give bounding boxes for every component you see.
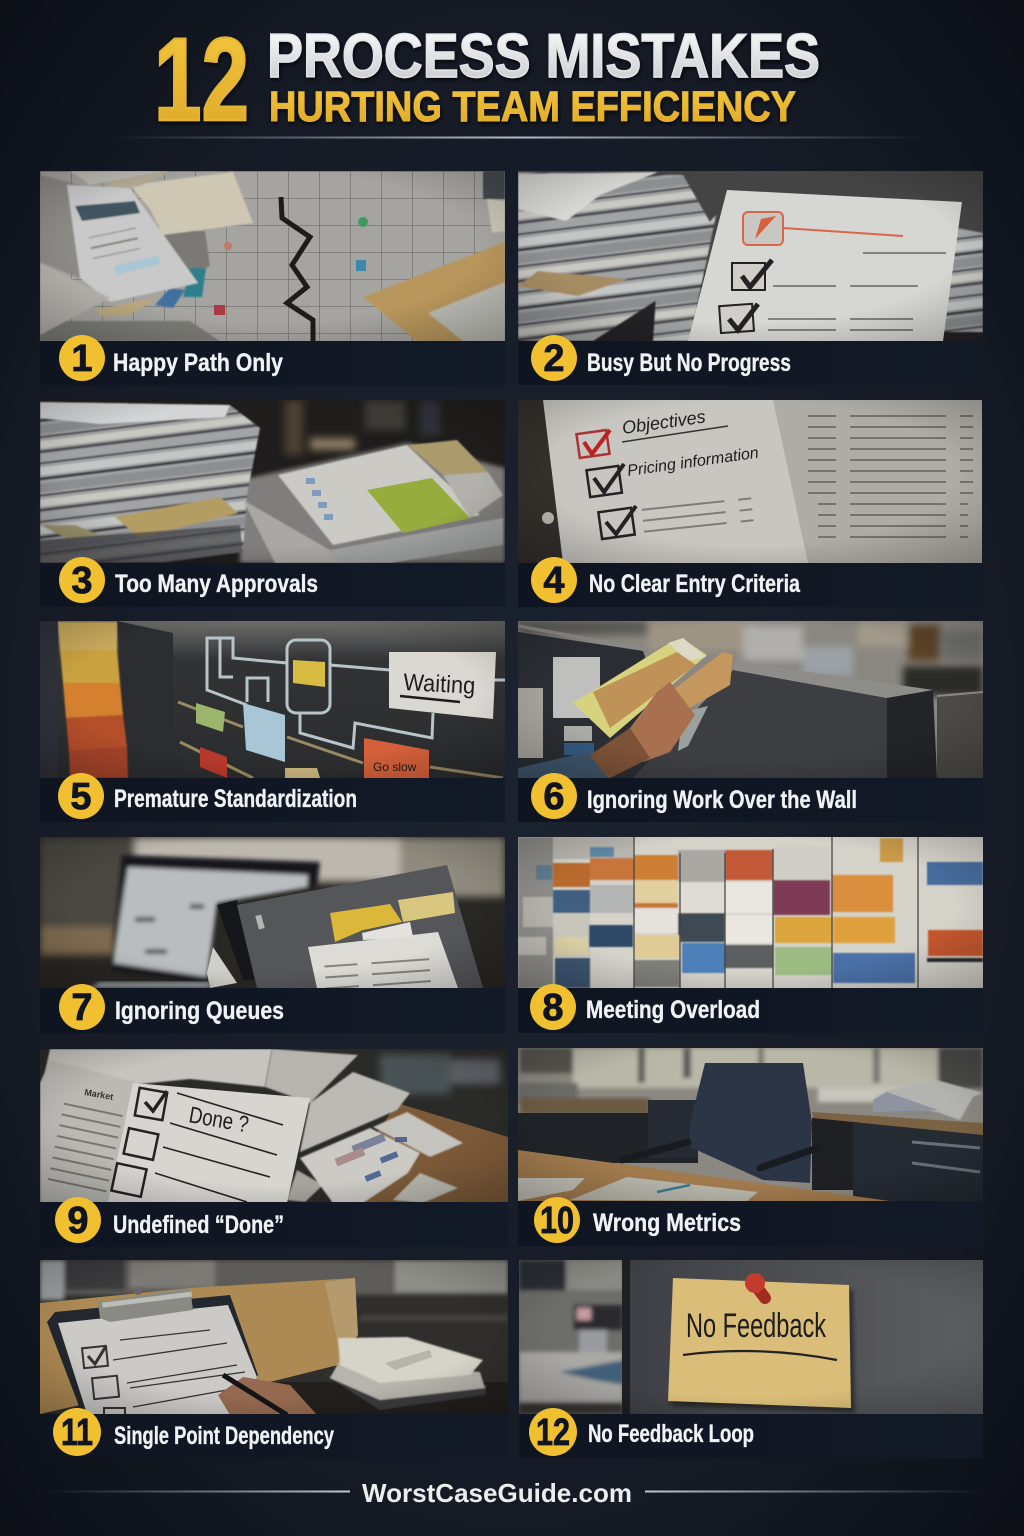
caption band bbox=[40, 778, 505, 822]
pin bbox=[745, 1273, 765, 1298]
photo: empty office chair bbox=[518, 1048, 983, 1201]
footer site name: WorstCaseGuide.com bbox=[362, 1478, 632, 1508]
photo: approval paper piles bbox=[40, 400, 505, 563]
number badge 2: 2 bbox=[543, 338, 565, 380]
caption band bbox=[518, 988, 983, 1033]
number badge 8 bbox=[530, 984, 576, 1030]
caption band bbox=[518, 341, 983, 385]
caption: Undefined “Done” bbox=[113, 1211, 284, 1239]
number badge 9 bbox=[55, 1197, 101, 1243]
caption: Wrong Metrics bbox=[593, 1209, 741, 1237]
number badge 10: 10 bbox=[540, 1200, 574, 1242]
panel 6: Ignoring Work Over the Wall bbox=[518, 621, 983, 822]
panel 12: No Feedback Loop bbox=[519, 1260, 983, 1458]
title number 12: 12 bbox=[154, 14, 249, 146]
caption: Premature Standardization bbox=[114, 785, 357, 813]
number badge 7 bbox=[59, 984, 105, 1030]
caption band bbox=[518, 563, 982, 607]
number badge 1: 1 bbox=[71, 338, 93, 380]
photo: laptop and stuffed folder bbox=[40, 837, 505, 988]
panel 4: No Clear Entry Criteria bbox=[518, 400, 982, 607]
photo: process board with waiting note: Go slow bbox=[373, 760, 417, 774]
title bbox=[154, 14, 820, 146]
number badge 9: 9 bbox=[67, 1200, 89, 1242]
number badge 12: 12 bbox=[536, 1412, 570, 1454]
caption: Happy Path Only bbox=[113, 349, 283, 377]
caption band bbox=[519, 1414, 983, 1458]
title line 1: PROCESS MISTAKES bbox=[267, 22, 820, 91]
number badge 4 bbox=[531, 557, 577, 603]
handwriting: Done ? bbox=[187, 1101, 251, 1137]
panel 1: Happy Path Only bbox=[40, 171, 505, 385]
photo: checklist papers bbox=[518, 400, 982, 563]
photo: checklist papers: Pricing information bbox=[626, 445, 760, 480]
number badge 8: 8 bbox=[542, 987, 564, 1029]
photo: grid map with broken path bbox=[40, 171, 505, 341]
photo: clipboard with signing hand bbox=[40, 1260, 508, 1414]
title line 2: HURTING TEAM EFFICIENCY bbox=[269, 83, 796, 131]
number badge 1 bbox=[59, 335, 105, 381]
number badge 11: 11 bbox=[61, 1412, 93, 1454]
handwriting note: Waiting bbox=[403, 669, 476, 700]
panel 8: Meeting Overload bbox=[518, 837, 983, 1033]
photo: hand passing folder over cubicle wall bbox=[518, 621, 983, 778]
number badge 4: 4 bbox=[543, 560, 565, 602]
number badge 6: 6 bbox=[543, 776, 565, 818]
panel 10: Wrong Metrics bbox=[518, 1048, 983, 1246]
panel 11: Single Point Dependency bbox=[40, 1260, 508, 1458]
photo: process board with waiting note bbox=[40, 621, 505, 778]
caption: Meeting Overload bbox=[586, 996, 760, 1024]
number badge 5: 5 bbox=[70, 776, 92, 818]
number badge 3: 3 bbox=[71, 560, 93, 602]
caption band bbox=[518, 1201, 983, 1246]
caption band bbox=[40, 1202, 508, 1247]
photo: checklist on desk: Market bbox=[84, 1087, 114, 1102]
caption: No Feedback Loop bbox=[588, 1420, 754, 1448]
caption: Ignoring Queues bbox=[115, 997, 284, 1025]
handwriting: Objectives bbox=[621, 406, 707, 438]
caption: No Clear Entry Criteria bbox=[589, 570, 801, 598]
photo: crowded wall calendar bbox=[518, 837, 983, 988]
number badge 2 bbox=[531, 335, 577, 381]
caption band bbox=[40, 563, 505, 607]
panel 9: Undefined "Done" bbox=[40, 1049, 508, 1247]
caption: Busy But No Progress bbox=[587, 349, 791, 377]
number badge 6 bbox=[531, 773, 577, 819]
panel 7: Ignoring Queues bbox=[40, 837, 505, 1033]
caption: Ignoring Work Over the Wall bbox=[587, 786, 857, 814]
handwriting note: No Feedback bbox=[686, 1307, 827, 1345]
caption band bbox=[40, 988, 505, 1033]
photo: checklist on desk bbox=[40, 1049, 508, 1202]
number badge 7: 7 bbox=[71, 987, 93, 1029]
number badge 5 bbox=[58, 773, 104, 819]
photo: pinned note on wall bbox=[519, 1260, 983, 1414]
caption: Too Many Approvals bbox=[115, 570, 318, 598]
photo: paper stack and checklist bbox=[518, 171, 983, 341]
caption band bbox=[40, 1414, 508, 1458]
panel 3: Too Many Approvals bbox=[40, 400, 505, 607]
number badge 3 bbox=[59, 557, 105, 603]
panel 5: Premature Standardization bbox=[40, 621, 505, 822]
panel 2: Busy But No Progress bbox=[518, 171, 983, 385]
caption band bbox=[518, 778, 983, 822]
caption: Single Point Dependency bbox=[114, 1422, 334, 1450]
caption band bbox=[40, 341, 505, 385]
